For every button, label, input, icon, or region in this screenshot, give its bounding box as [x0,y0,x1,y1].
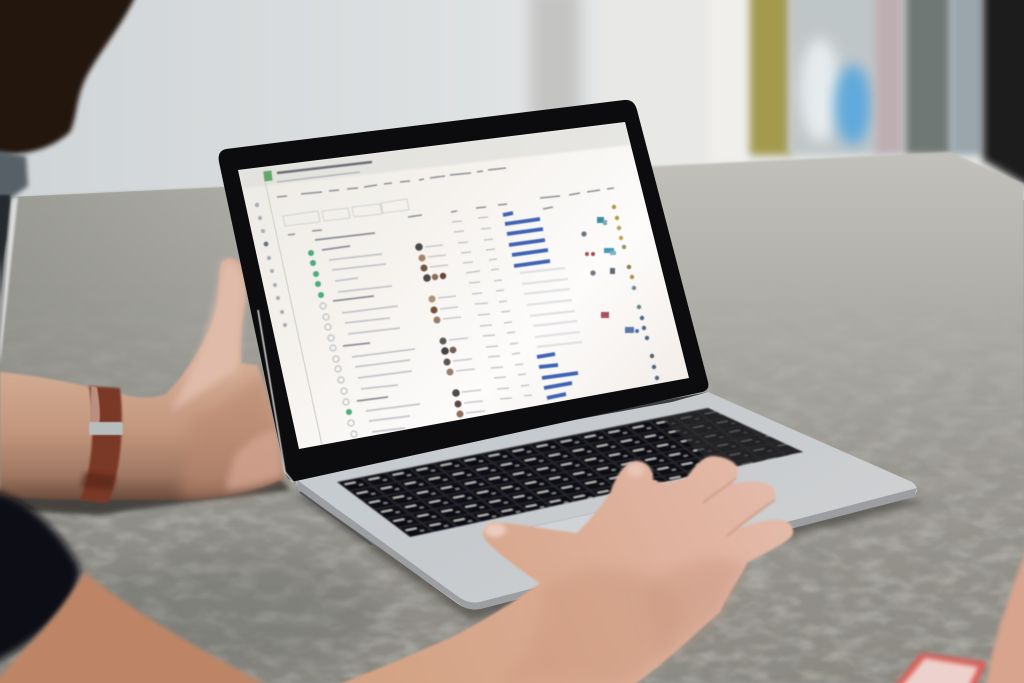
gantt bars: pale [520,268,582,347]
near arm and typing hand [325,456,793,683]
app top bar [238,122,631,188]
background: blurred room [0,0,1024,200]
date columns [452,217,532,399]
assignee avatars [415,243,464,418]
playing card box corner [893,653,987,683]
near forearm, blurred [0,572,275,683]
menu bar [277,168,614,198]
sidebar icons [255,203,287,327]
right edge arm [985,540,1024,683]
screen [238,122,689,449]
right column tags [612,205,659,380]
toolbar buttons [283,199,409,226]
app logo [263,171,273,181]
status dots [308,250,352,415]
sidebar rule [263,172,322,445]
empty status rings [320,303,357,437]
person: head and shoulder silhouette [0,0,136,290]
app interface [238,122,659,445]
task name rows [315,233,420,432]
timeline markers [581,217,639,333]
hinge [296,392,708,470]
screen bezel [219,100,708,481]
black sleeve [0,490,80,665]
laptop base [296,392,917,609]
column headers [288,204,553,235]
shadow under resting arm [0,478,290,515]
table: concrete surface [0,152,1024,683]
laptop [219,100,917,610]
document title [277,162,372,173]
gantt bars: blue [503,213,578,398]
assignee names [425,245,485,413]
keyboard [337,408,803,537]
left hand holding the screen [0,258,286,500]
trackpad [530,503,700,548]
laptop shadow [296,480,925,620]
leather wrist strap [80,386,123,503]
